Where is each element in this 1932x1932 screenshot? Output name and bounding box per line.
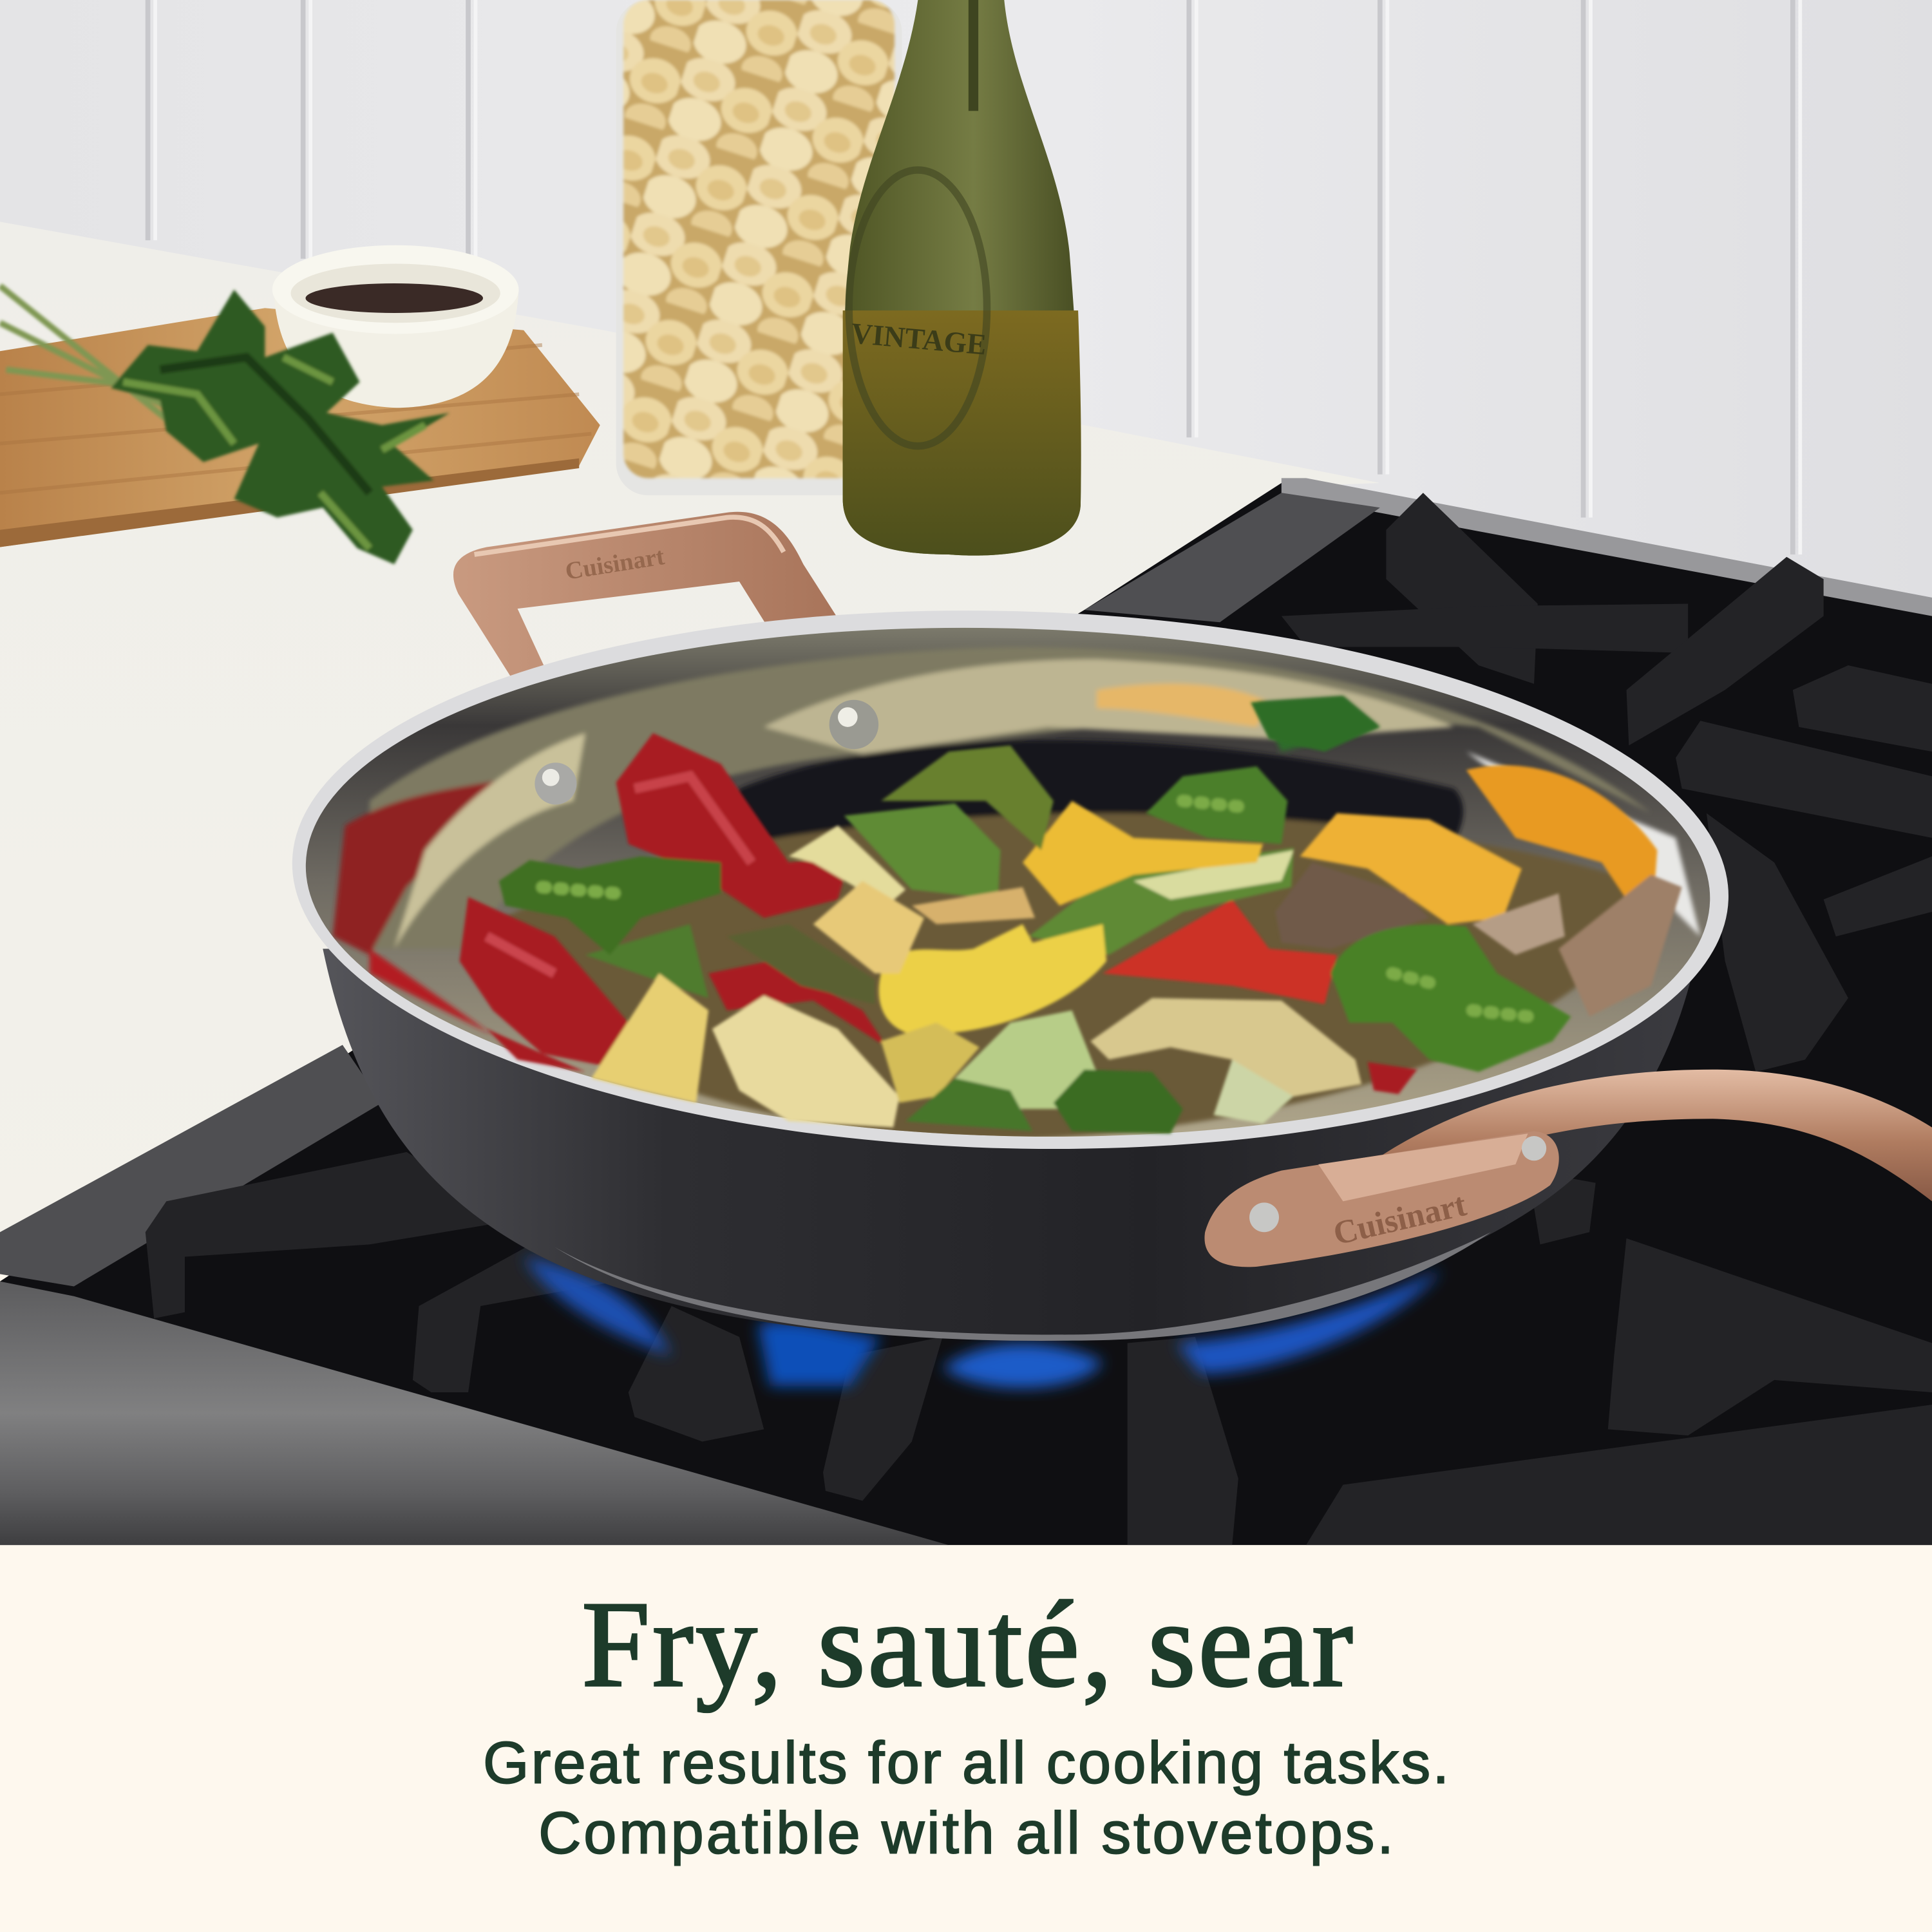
- stove front steel: [0, 1282, 949, 1545]
- red peppers: [460, 733, 1417, 1094]
- subtitle: [483, 1730, 1449, 1866]
- subtitle: Compatible with all stovetops.: [538, 1801, 1394, 1866]
- vegetables: [460, 696, 1682, 1133]
- parsley: [0, 286, 450, 564]
- title: Fry, sauté, sear: [582, 1577, 1353, 1712]
- cutting board: [0, 308, 600, 547]
- olive oil bottle: [843, 0, 1081, 556]
- pan base: [554, 1232, 1491, 1341]
- right long handle: [1204, 1070, 1932, 1267]
- front burner grates: [146, 1152, 1932, 1545]
- photo scene: kitchen backdrop: [0, 0, 1932, 1545]
- frying pan: [283, 512, 1932, 1341]
- bowl of peppercorns: [272, 245, 518, 408]
- pan rim: [285, 592, 1736, 1167]
- pan body: [323, 949, 1698, 1339]
- counter top: [0, 222, 1380, 1244]
- bottle label text: VINTAGE: [849, 316, 988, 361]
- rivets: [535, 700, 878, 804]
- stove top: [0, 483, 1932, 1545]
- broccoli: [499, 696, 1571, 1133]
- pan interior: [305, 627, 1710, 1137]
- mushrooms: [1275, 862, 1682, 1016]
- handle brand text: Cuisinart: [564, 543, 667, 585]
- caption panel: [0, 1545, 1932, 1932]
- stove back rim: [1282, 478, 1932, 616]
- tiled wall: [0, 0, 1932, 616]
- back handle: [453, 512, 840, 677]
- stove side rim: [0, 493, 1380, 1286]
- back burner grates: [1282, 493, 1932, 1072]
- subtitle: Great results for all cooking tasks.: [483, 1730, 1449, 1795]
- pasta jar: [616, 0, 902, 495]
- zucchini and squash: [585, 765, 1657, 1128]
- handle plate brand text: Cuisinart: [1330, 1186, 1470, 1253]
- wall reflection: [370, 647, 1651, 949]
- food base: [468, 813, 1651, 1140]
- gas flames: [524, 1257, 1442, 1388]
